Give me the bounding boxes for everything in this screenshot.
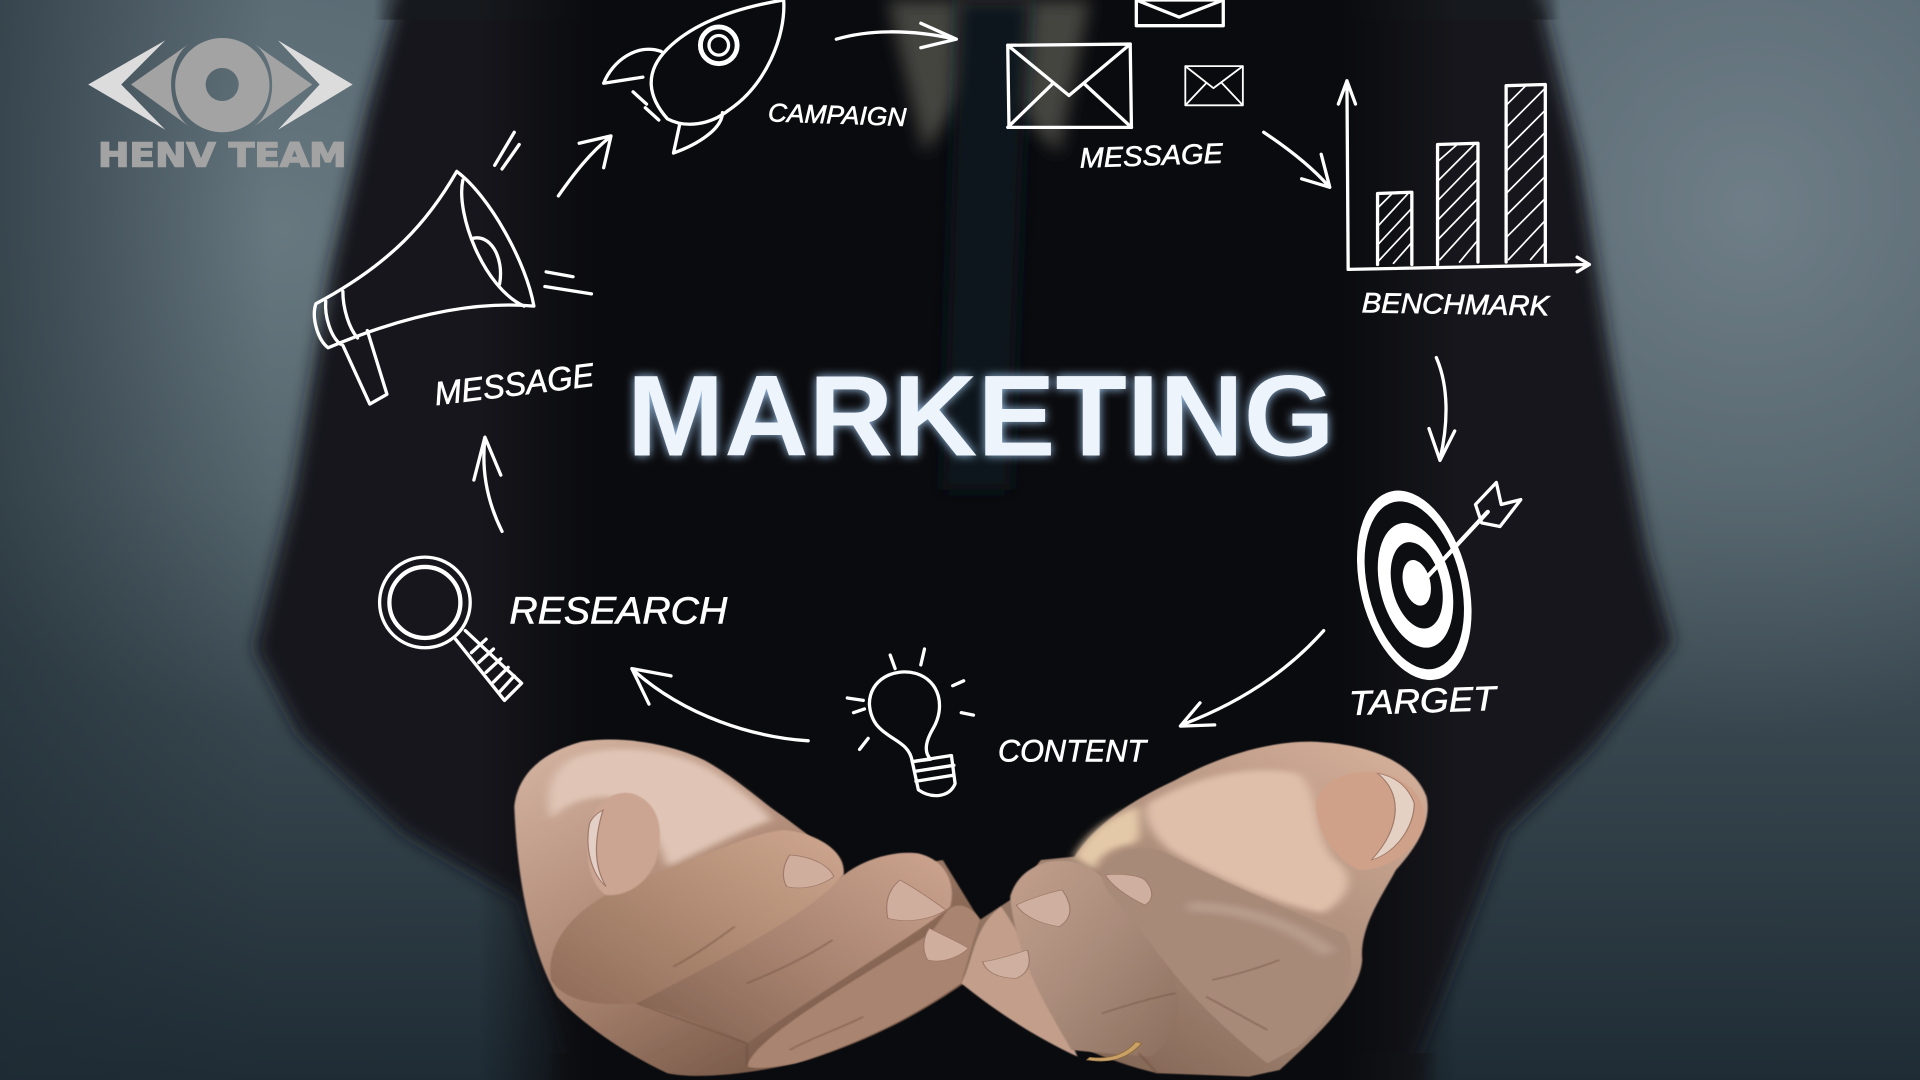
right hand	[637, 742, 1428, 1077]
logo chevrons	[88, 40, 353, 130]
businessman suit	[255, 0, 1673, 1080]
text: campaign: CAMPAIGN	[768, 99, 907, 132]
right nails and ring	[983, 773, 1414, 1061]
icon: rocket	[604, 0, 784, 153]
text: message top: MESSAGE	[1079, 138, 1225, 174]
title: marketing: MARKETING	[627, 353, 1335, 481]
text: message left: MESSAGE	[432, 357, 597, 413]
right thumb	[1316, 772, 1425, 870]
icon: target	[1339, 478, 1521, 692]
title: marketing: MARKETING	[627, 353, 1335, 481]
arrow: rocket to envelope	[836, 23, 956, 48]
right hand base and palm	[961, 742, 1428, 1077]
arrow: content to research	[632, 669, 808, 741]
logo eye	[131, 44, 312, 126]
arrow: envelope to chart	[1264, 132, 1330, 187]
icon: light bulb	[847, 649, 973, 796]
logo: Henv Team	[88, 38, 353, 175]
right index finger	[1102, 848, 1351, 1063]
arrow: research to message	[474, 437, 502, 531]
left hand	[514, 740, 983, 1076]
text: content: CONTENT	[998, 733, 1149, 769]
hand creases	[637, 927, 1280, 1073]
arrow: chart to target	[1429, 358, 1455, 460]
icon: magnifier	[380, 557, 522, 700]
text: benchmark: BENCHMARK	[1362, 287, 1551, 322]
left nails	[588, 810, 969, 961]
arrow: target to content	[1180, 631, 1324, 726]
text: target: TARGET	[1348, 680, 1499, 723]
arrow: message to rocket	[558, 136, 611, 196]
text: research: RESEARCH	[509, 590, 728, 632]
bar chart: benchmark	[1338, 81, 1589, 272]
icon: megaphone	[314, 132, 591, 404]
left little finger	[747, 906, 983, 1068]
right middle finger	[1010, 861, 1179, 1057]
left hand base and palm	[514, 740, 980, 1076]
left middle finger	[637, 853, 952, 1043]
right little finger	[961, 907, 1078, 1057]
icon: envelopes	[1008, 0, 1243, 127]
left thumb	[587, 793, 660, 895]
left index finger	[550, 830, 844, 1004]
logo wordmark: HENV TEAM	[98, 136, 347, 175]
